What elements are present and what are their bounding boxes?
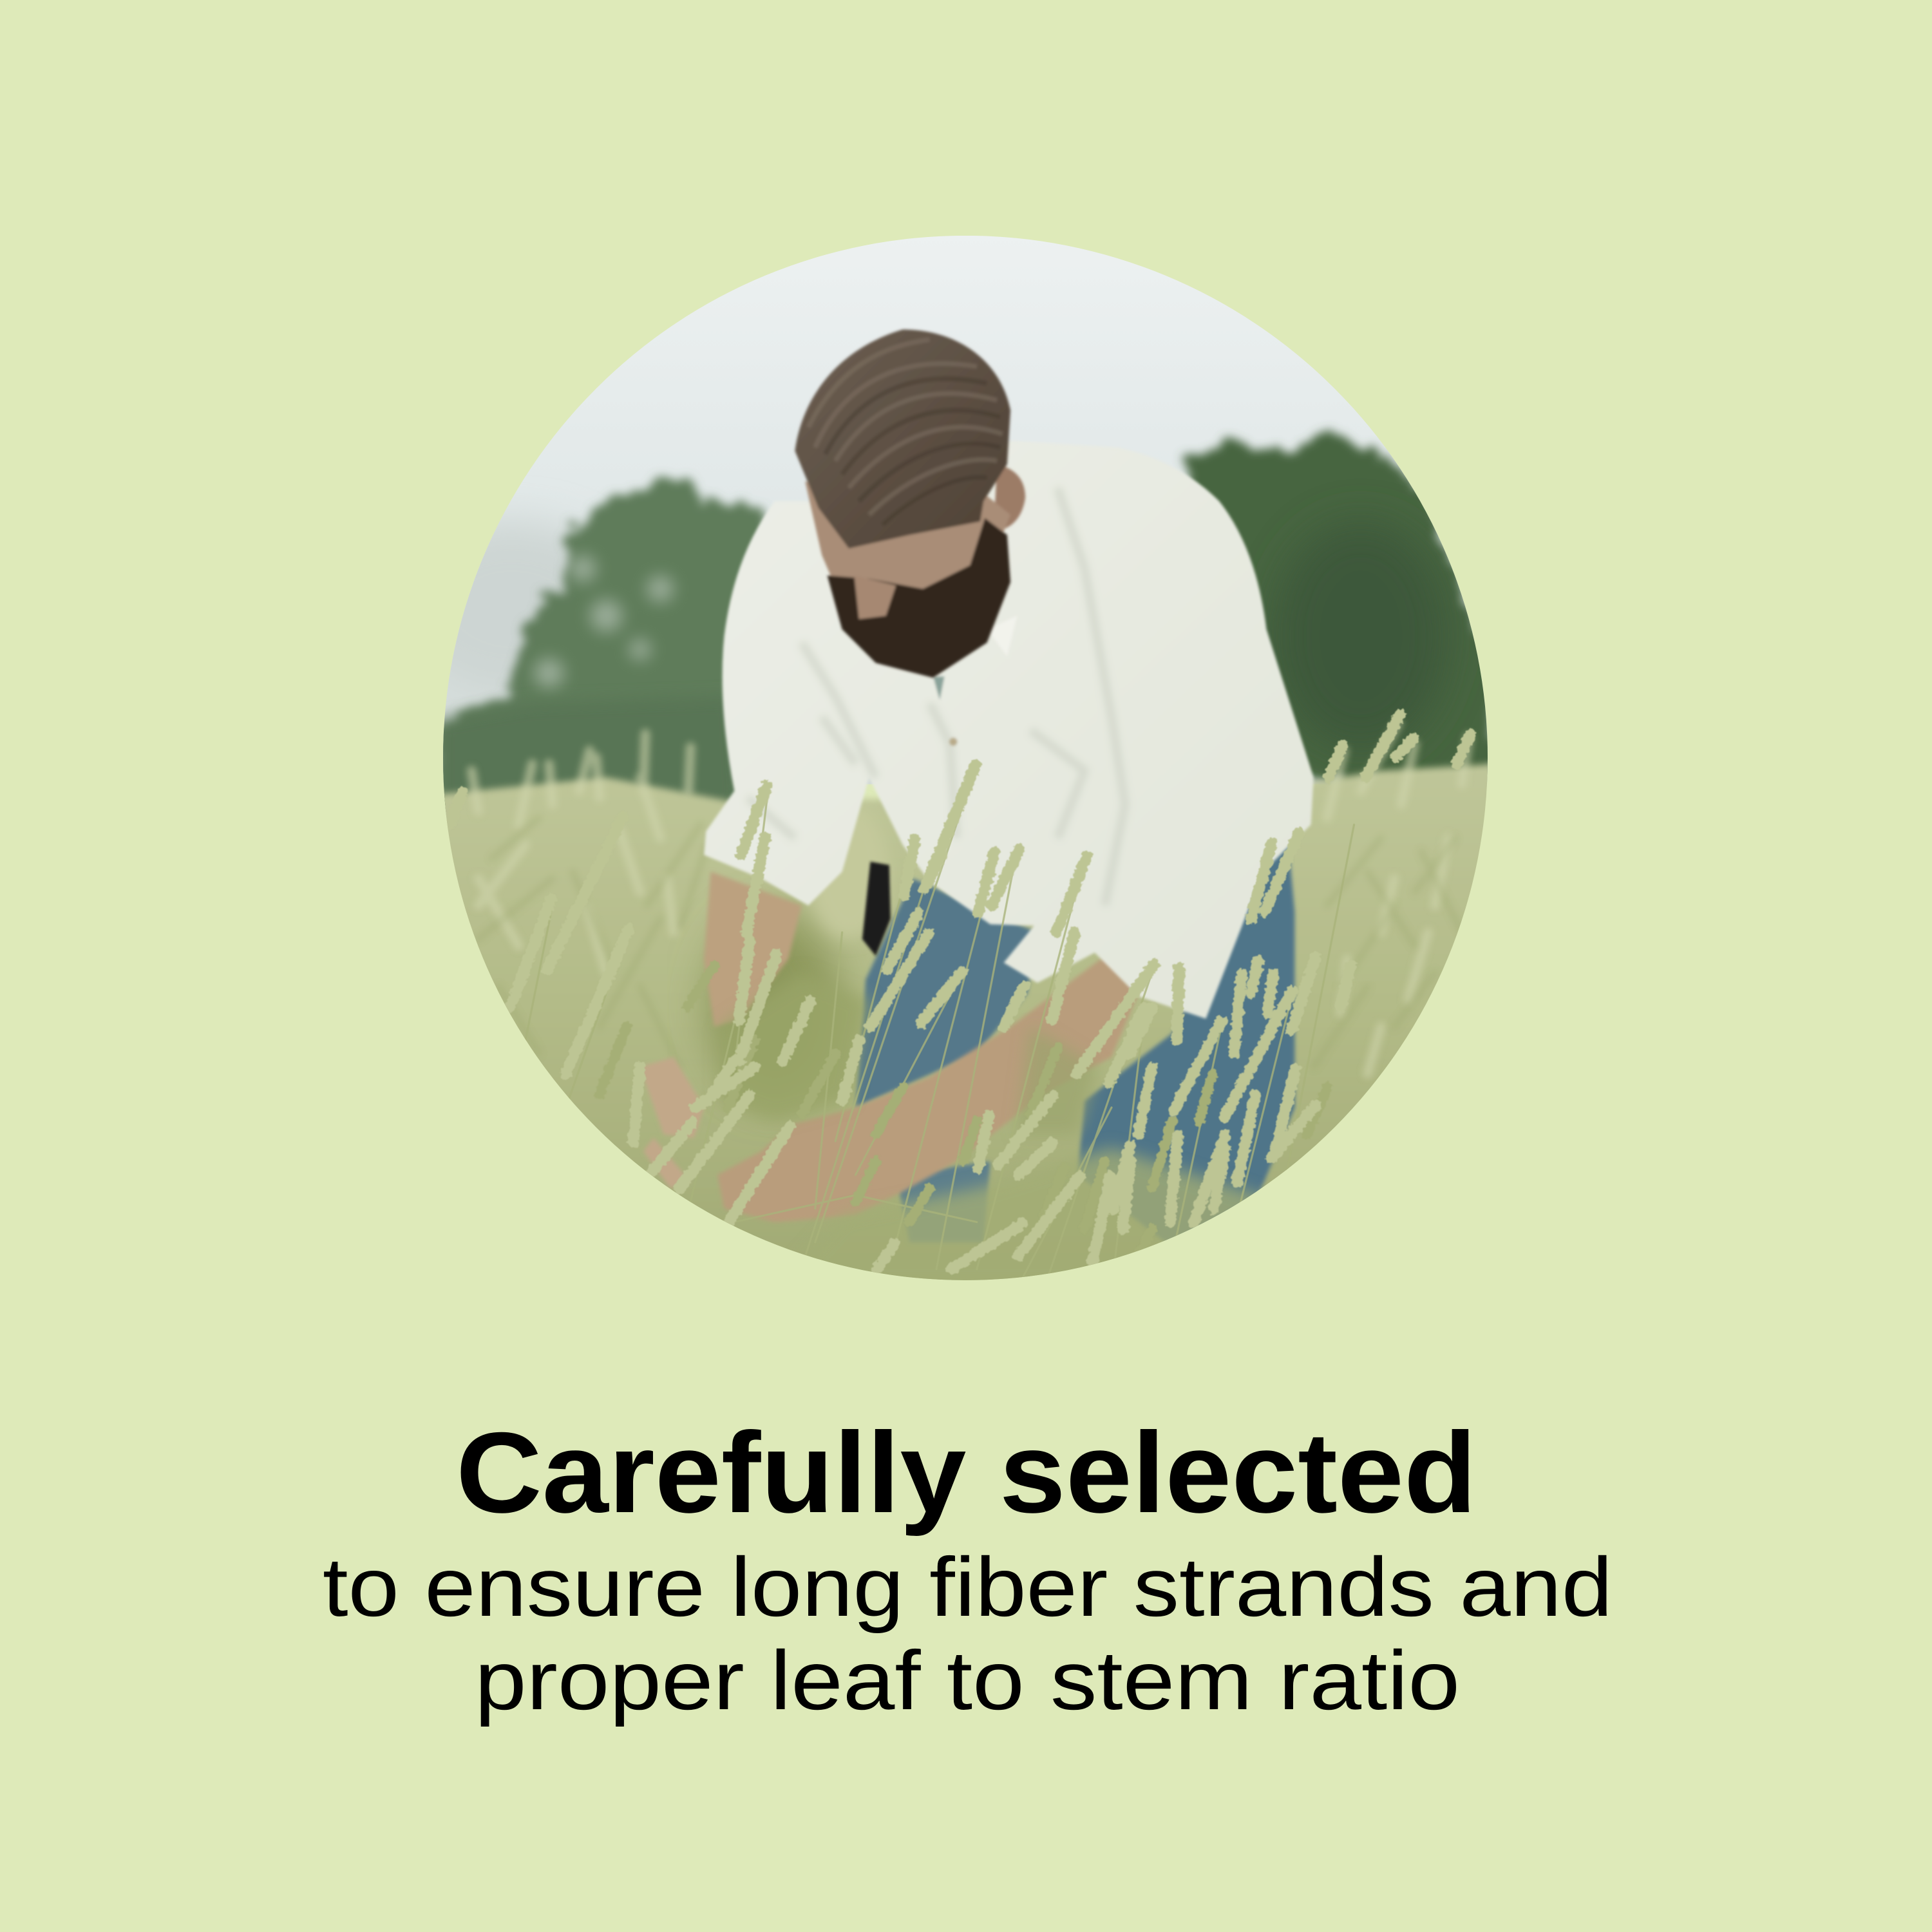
nose <box>854 575 896 619</box>
hair <box>795 330 1010 549</box>
black phone holster <box>862 862 891 956</box>
sky <box>397 232 1494 784</box>
jeans <box>856 838 1294 1242</box>
background trees <box>438 434 1494 811</box>
body line 2: proper leaf to stem ratio <box>475 1633 1460 1727</box>
background seed heads, darker and softer <box>600 966 1327 1269</box>
ear <box>994 464 1025 531</box>
hair streaks <box>808 339 1003 515</box>
head <box>795 330 1025 677</box>
face <box>805 481 1010 621</box>
mid-ground grass over legs and arms <box>721 973 1314 1288</box>
foreground stems <box>526 764 1354 1288</box>
right forearm and hand <box>717 956 1139 1222</box>
caption text block <box>323 1408 1613 1727</box>
left forearm and hand <box>640 872 802 1188</box>
body line 1: to ensure long fiber strands and <box>323 1540 1613 1634</box>
grass field <box>438 724 1494 1288</box>
heading: Carefully selected <box>456 1408 1477 1537</box>
circular photo: man inspecting grass in a field <box>443 236 1488 1280</box>
beard <box>828 518 1010 677</box>
white shirt <box>704 440 1314 1019</box>
foreground grass seed heads <box>450 715 1470 1269</box>
